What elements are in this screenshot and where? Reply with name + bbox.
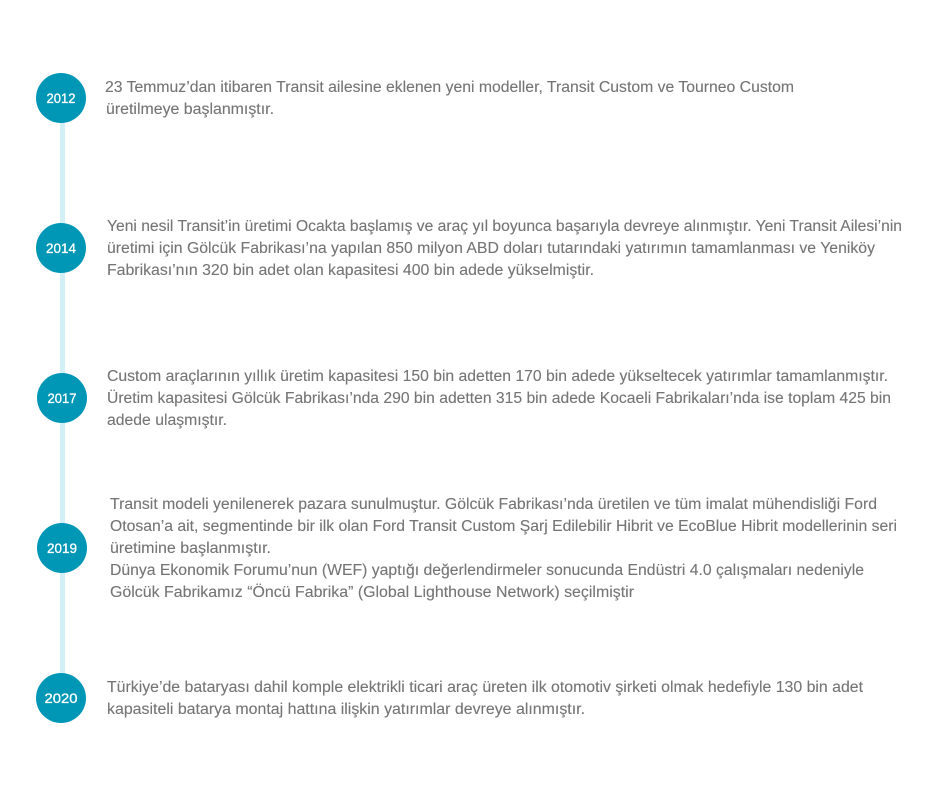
2014 text block: Fabrikası’nın 320 bin adet olan kapasitesi 400 bin adede yükselmiştir. (107, 262, 594, 279)
2019 text block: Dünya Ekonomik Forumu’nun (WEF) yaptığı değerlendirmeler sonucunda Endüstri 4.0 çalışmaları nedeniyle (110, 562, 864, 579)
2020 text block: Türkiye’de bataryası dahil komple elektrikli ticari araç üreten ilk otomotiv şirketi olmak hedefiyle 130 bin adet (107, 679, 864, 696)
2014 text block: Yeni nesil Transit’in üretimi Ocakta başlamış ve araç yıl boyunca başarıyla devreye alınmıştır. Yeni Transit Ailesi’nin (107, 218, 902, 235)
2012 text block (105, 79, 794, 118)
timeline vertical line (60, 110, 65, 690)
2019 text block (110, 496, 897, 601)
2012 text block: 23 Temmuz’dan itibaren Transit ailesine eklenen yeni modeller, Transit Custom ve Tourneo Custom (105, 79, 794, 96)
2014 year marker (36, 223, 86, 273)
2019 text block: Transit modeli yenilenerek pazara sunulmuştur. Gölcük Fabrikası’nda üretilen ve tüm imalat mühendisliği Ford (110, 496, 877, 513)
2012 year marker (36, 73, 86, 123)
2020 year marker (36, 673, 86, 723)
2020 text block (107, 679, 864, 718)
2012 text block: üretilmeye başlanmıştır. (106, 101, 274, 118)
2017 text block: adede ulaşmıştır. (107, 412, 227, 429)
2014 text block (107, 218, 902, 279)
2014 text block: üretimi için Gölcük Fabrikası’na yapılan 850 milyon ABD doları tutarındaki yatırımın tamamlanması ve Yeniköy (107, 240, 875, 257)
2019 text block: Gölcük Fabrikamız “Öncü Fabrika” (Global Lighthouse Network) seçilmiştir (110, 583, 634, 601)
2012 year marker: 2012 (46, 90, 76, 106)
2017 text block: Custom araçlarının yıllık üretim kapasitesi 150 bin adetten 170 bin adede yükseltecek yatırımlar tamamlanmıştır. (107, 368, 888, 385)
2019 year marker (37, 523, 87, 573)
2019 text block: Otosan’a ait, segmentinde bir ilk olan Ford Transit Custom Şarj Edilebilir Hibrit ve EcoBlue Hibrit modellerinin seri (110, 518, 897, 535)
2020 year marker: 2020 (44, 690, 78, 706)
2019 text block: üretimine başlanmıştır. (110, 540, 271, 557)
2014 year marker: 2014 (46, 240, 76, 256)
2017 text block (107, 368, 891, 429)
2020 text block: kapasiteli batarya montaj hattına ilişkin yatırımlar devreye alınmıştır. (107, 701, 585, 718)
2017 year marker (37, 373, 87, 423)
2017 text block: Üretim kapasitesi Gölcük Fabrikası’nda 290 bin adetten 315 bin adede Kocaeli Fabrikaları’nda ise toplam 425 bin (107, 389, 891, 407)
2017 year marker: 2017 (48, 390, 77, 406)
2019 year marker: 2019 (47, 540, 77, 556)
